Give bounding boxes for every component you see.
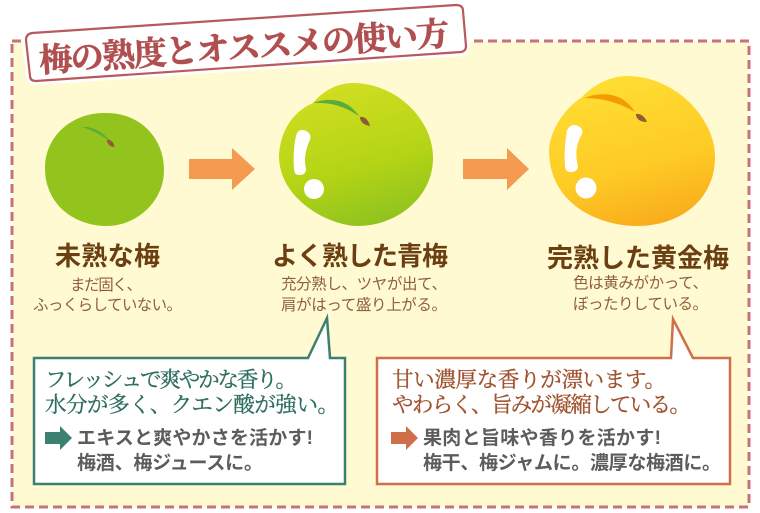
stage 2 label: 肩がはって盛り上がる。 bbox=[281, 296, 447, 314]
stage 3 label: 色は黄みがかって、 bbox=[573, 274, 708, 292]
stage 3 label: 完熟した黄金梅 bbox=[547, 243, 729, 273]
plum 1: unripe bbox=[45, 113, 164, 226]
stage 1 label bbox=[33, 241, 182, 314]
stage 2 label: よく熟した青梅 bbox=[272, 241, 448, 271]
stage 2 label: 充分熟し、ツヤが出て、 bbox=[281, 275, 447, 293]
icon: red arrow bbox=[391, 426, 418, 450]
callout: green bbox=[34, 318, 345, 484]
callout action text: 梅酒、梅ジュースに。 bbox=[77, 451, 263, 474]
stage 3 label: ぼったりしている。 bbox=[573, 295, 708, 313]
callout lead text: 甘い濃厚な香りが漂います。 bbox=[392, 368, 666, 392]
callout action text: 梅干、梅ジャムに。濃厚な梅酒に。 bbox=[423, 451, 721, 474]
stage 2 label bbox=[272, 241, 448, 314]
title plate bbox=[26, 5, 466, 81]
callout action text: エキスと爽やかさを活かす! bbox=[77, 427, 313, 449]
callout lead text: フレッシュで爽やかな香り。 bbox=[45, 368, 297, 392]
stage 3 label bbox=[547, 243, 729, 313]
callout: red bbox=[377, 319, 730, 484]
callout lead text: やわらく、旨みが凝縮している。 bbox=[392, 393, 691, 417]
stage 1 label: 未熟な梅 bbox=[55, 241, 160, 271]
stage 1 label: まだ固く、 bbox=[70, 277, 142, 294]
stage 1 label: ふっくらしていない。 bbox=[33, 296, 182, 314]
icon: green arrow bbox=[45, 426, 72, 450]
plum 3: golden bbox=[549, 76, 715, 226]
arrow 1 bbox=[189, 148, 255, 190]
callout action text: 果肉と旨味や香りを活かす! bbox=[423, 427, 661, 449]
plum 2: ripe green bbox=[279, 83, 433, 226]
callout lead text: 水分が多く、クエン酸が強い。 bbox=[45, 393, 339, 417]
arrow 2 bbox=[463, 148, 529, 190]
title text: 梅の熟度とオススメの使い方 bbox=[38, 16, 451, 80]
